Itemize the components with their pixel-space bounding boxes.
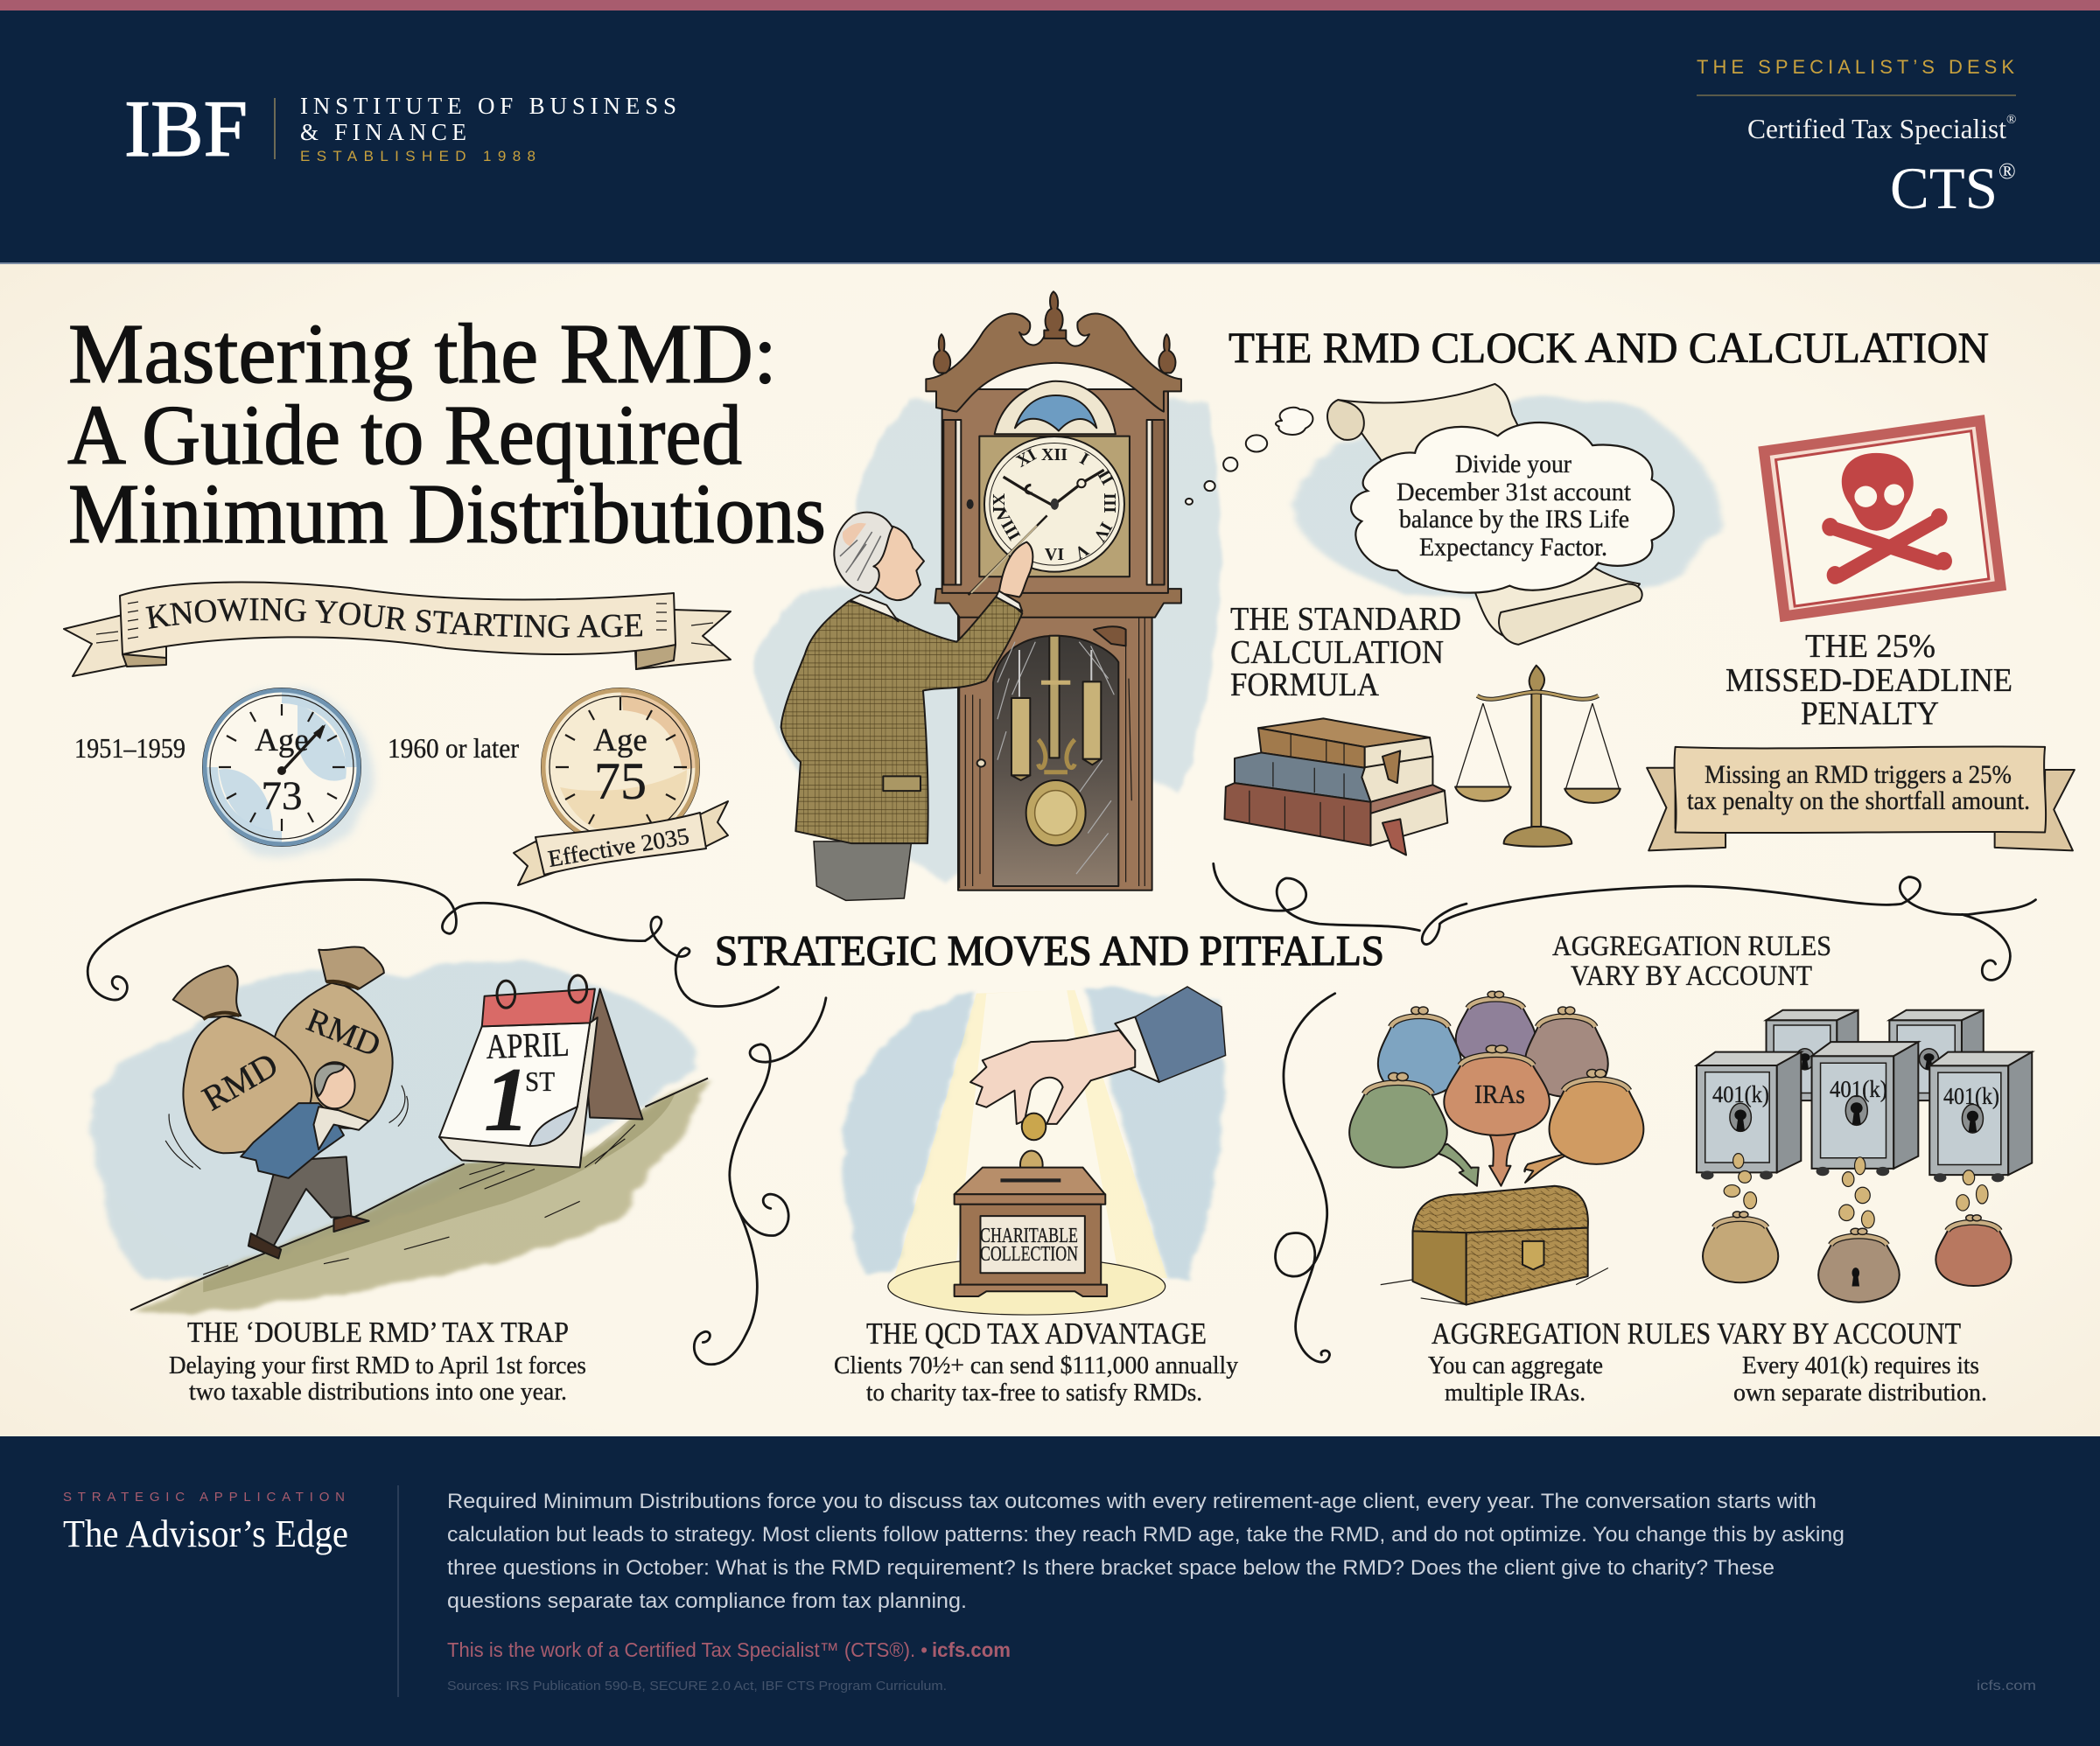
sources: Sources: IRS Publication 590-B, SECURE 2.0 Act, IBF CTS Program Curriculum. [447, 1679, 947, 1694]
caption: QCD tax advantage: to charity tax-free to satisfy RMDs. [866, 1379, 1202, 1407]
man's legs [814, 842, 912, 900]
books [1224, 718, 1447, 856]
charity box label: COLLECTION [980, 1243, 1078, 1266]
heading: 25% penalty: PENALTY [1801, 695, 1939, 732]
credential block: CTS [1890, 155, 1998, 221]
text on money bags and calendar [196, 1002, 570, 1150]
clock: age 75 [514, 688, 728, 885]
penalty banner text: tax penalty on the shortfall amount. [1687, 786, 2030, 815]
treasure chest [1381, 1186, 1608, 1305]
credential block: THE SPECIALIST’S DESK [1697, 56, 2014, 78]
heading: standard calculation formula: THE STANDARD [1230, 601, 1461, 638]
heading: standard calculation formula: CALCULATION [1230, 634, 1444, 671]
banner: knowing your starting age: KNOWING YOUR STARTING AGE [145, 598, 642, 638]
red stamp [1764, 421, 2000, 616]
illustration: man adjusting grandfather clock [752, 291, 1221, 900]
heading: 25% penalty: THE 25% [1805, 628, 1936, 665]
clock: age 73: Age [255, 723, 309, 758]
balance scales [1455, 666, 1620, 847]
penalty banner [1647, 746, 2075, 850]
top accent bar [0, 0, 2100, 10]
banner: knowing your starting age [63, 581, 732, 677]
footer body: three questions in October: What is the RMD requirement? Is there bracket space below the RMD? Does the client give to charity? These [447, 1556, 1774, 1580]
credential block: ® [2006, 113, 2016, 127]
footer body: questions separate tax compliance from tax planning. [447, 1589, 967, 1613]
man's head [834, 513, 924, 600]
caption: aggregation rules [1428, 1316, 1987, 1407]
logo: IBF: IBF [124, 84, 248, 173]
penalty banner text [1687, 760, 2030, 815]
logo: IBF: INSTITUTE OF BUSINESS [300, 93, 676, 119]
footer band [0, 1436, 2100, 1746]
footer body: Required Minimum Distributions force you to discuss tax outcomes with every retirement-age client, every year. The conversation starts with [447, 1490, 1816, 1513]
heading: aggregation rules [1552, 931, 1831, 992]
thought cloud text: December 31st account [1396, 478, 1632, 506]
clock numerals: II [1094, 467, 1117, 488]
clock numerals: V [1071, 540, 1092, 563]
falling coins [1724, 1154, 1988, 1228]
spotlight [894, 990, 1167, 1278]
charity box label [980, 1225, 1078, 1266]
motion lines [165, 1086, 408, 1170]
clock numerals: VIII [990, 506, 1024, 544]
labels on purses and safes [1474, 1076, 1999, 1109]
clock: age 75: 75 [594, 752, 647, 810]
heading: standard calculation formula [1230, 601, 1461, 703]
credential block: ® [1998, 158, 2016, 184]
title: Minimum Distributions [68, 467, 826, 562]
credential block [1697, 56, 2016, 221]
illustration group: thought cloud, scroll, books, scales [1186, 384, 2075, 856]
safes [1697, 1010, 2032, 1182]
clock numerals: I [1076, 449, 1092, 469]
thought cloud text: Expectancy Factor. [1419, 533, 1607, 562]
caption: double RMD tax trap: Delaying your first RMD to April 1st forces [169, 1351, 586, 1379]
birth year: 1951-1959: 1951–1959 [74, 732, 186, 764]
coins [1022, 1114, 1046, 1140]
caption: double RMD tax trap: THE ‘DOUBLE RMD’ TAX TRAP [187, 1316, 569, 1349]
footer heading: The Advisor’s Edge [63, 1512, 348, 1555]
watercolor wash [844, 994, 976, 1275]
thought cloud [1186, 408, 1674, 593]
hand and stylus [969, 515, 1047, 611]
logo: IBF: ESTABLISHED 1988 [300, 148, 536, 164]
penalty banner text: Missing an RMD triggers a 25% [1704, 760, 2012, 789]
watercolor wash [92, 960, 696, 1278]
title: A Guide to Required [67, 388, 742, 483]
footer heading: STRATEGIC APPLICATION [63, 1490, 345, 1505]
caption: aggregation rules: multiple IRAs. [1445, 1379, 1586, 1407]
footer body [447, 1490, 1844, 1613]
thought cloud text: Divide your [1455, 450, 1572, 478]
panel: main illustration area [0, 262, 2100, 1436]
man carrying bags [241, 1062, 369, 1259]
text on money bags and calendar: RMD [301, 1002, 385, 1065]
caption: aggregation rules: Every 401(k) requires its [1742, 1351, 1979, 1379]
banner: effective 2035: Effective 2035 [546, 822, 691, 872]
title [67, 307, 826, 562]
caption: aggregation rules: AGGREGATION RULES VARY BY ACCOUNT [1432, 1316, 1961, 1351]
text on money bags and calendar: APRIL [486, 1024, 570, 1066]
call to action: icfs.com [932, 1638, 1011, 1661]
header band [0, 0, 2100, 262]
hill [136, 1079, 708, 1314]
caption: aggregation rules: own separate distribution. [1733, 1379, 1987, 1407]
caption: QCD tax advantage: THE QCD TAX ADVANTAGE [866, 1316, 1207, 1351]
banner: effective 2035 [514, 801, 728, 885]
caption: double RMD tax trap: two taxable distributions into one year. [189, 1378, 567, 1406]
call to action: This is the work of a Certified Tax Specialist™ (CTS®). • [447, 1638, 928, 1661]
grandfather clock [926, 291, 1181, 890]
clock numerals: VI [1045, 545, 1064, 564]
heading: 25% penalty [1726, 628, 2012, 732]
logo: IBF: & FINANCE [300, 119, 466, 145]
heading: strategic moves and pitfalls: STRATEGIC MOVES AND PITFALLS [715, 926, 1384, 974]
labels on purses and safes: 401(k) [1712, 1081, 1769, 1107]
illustration: QCD charitable box and hand [844, 987, 1226, 1315]
small purses [1703, 1212, 2012, 1303]
clock numerals: IX [990, 492, 1009, 513]
caption: QCD tax advantage: Clients 70½+ can send $111,000 annually [834, 1351, 1238, 1379]
logo: IBF [124, 84, 676, 173]
clock: age 73 [203, 688, 372, 855]
heading: 25% penalty: MISSED-DEADLINE [1726, 662, 2012, 699]
labels on purses and safes: 401(k) [1830, 1076, 1887, 1102]
footer url: icfs.com [1977, 1679, 2036, 1694]
charity box label: CHARITABLE [980, 1225, 1078, 1247]
money bags [173, 946, 393, 1153]
footer heading [63, 1490, 348, 1555]
birth year: 1960 or later: 1960 or later [388, 732, 519, 764]
thought cloud text [1396, 450, 1632, 562]
text on money bags and calendar: RMD [196, 1044, 284, 1119]
clock: age 75: Age [593, 723, 648, 758]
watercolor wash [752, 394, 1221, 882]
clock numerals: XII [1041, 445, 1068, 464]
clock numerals [990, 445, 1119, 564]
clock: age 73: 73 [261, 773, 303, 819]
illustration: purses, chest, safes [1276, 991, 2032, 1362]
caption: aggregation rules: You can aggregate [1428, 1351, 1603, 1379]
labels on purses and safes: 401(k) [1943, 1083, 1999, 1109]
flourishes [88, 880, 826, 1365]
hand [970, 987, 1226, 1124]
desk calendar [439, 975, 642, 1168]
flourish [1276, 994, 1335, 1362]
text on money bags and calendar: ST [525, 1065, 555, 1097]
thought cloud text: balance by the IRS Life [1399, 505, 1629, 534]
illustration: double RMD tax trap [88, 880, 826, 1365]
credential block: Certified Tax Specialist [1747, 113, 2006, 144]
caption: QCD tax advantage [834, 1316, 1238, 1407]
text on money bags and calendar: 1 [484, 1048, 530, 1150]
clock numerals: XI [1013, 445, 1040, 471]
watercolor wash [1297, 398, 1723, 601]
footer body: calculation but leads to strategy. Most clients follow patterns: they reach RMD age, take the RMD, and do not optimize. You change this by asking [447, 1523, 1844, 1547]
clock numerals: IV [1089, 519, 1116, 546]
scroll [1327, 384, 1642, 645]
heading: aggregation rules: VARY BY ACCOUNT [1571, 960, 1812, 992]
heading: aggregation rules: AGGREGATION RULES [1552, 931, 1831, 962]
labels on purses and safes: IRAs [1474, 1079, 1525, 1109]
heading: standard calculation formula: FORMULA [1230, 667, 1380, 703]
title: Mastering the RMD: [68, 307, 777, 402]
man's jacket [781, 593, 1022, 843]
flourish: top right [1214, 863, 2036, 980]
charity box [955, 1168, 1107, 1296]
heading: the RMD clock and calculation: THE RMD CLOCK AND CALCULATION [1228, 323, 1989, 372]
IRA purses [1349, 991, 1643, 1186]
clock numerals: III [1100, 492, 1119, 513]
caption: double RMD tax trap [169, 1316, 586, 1406]
